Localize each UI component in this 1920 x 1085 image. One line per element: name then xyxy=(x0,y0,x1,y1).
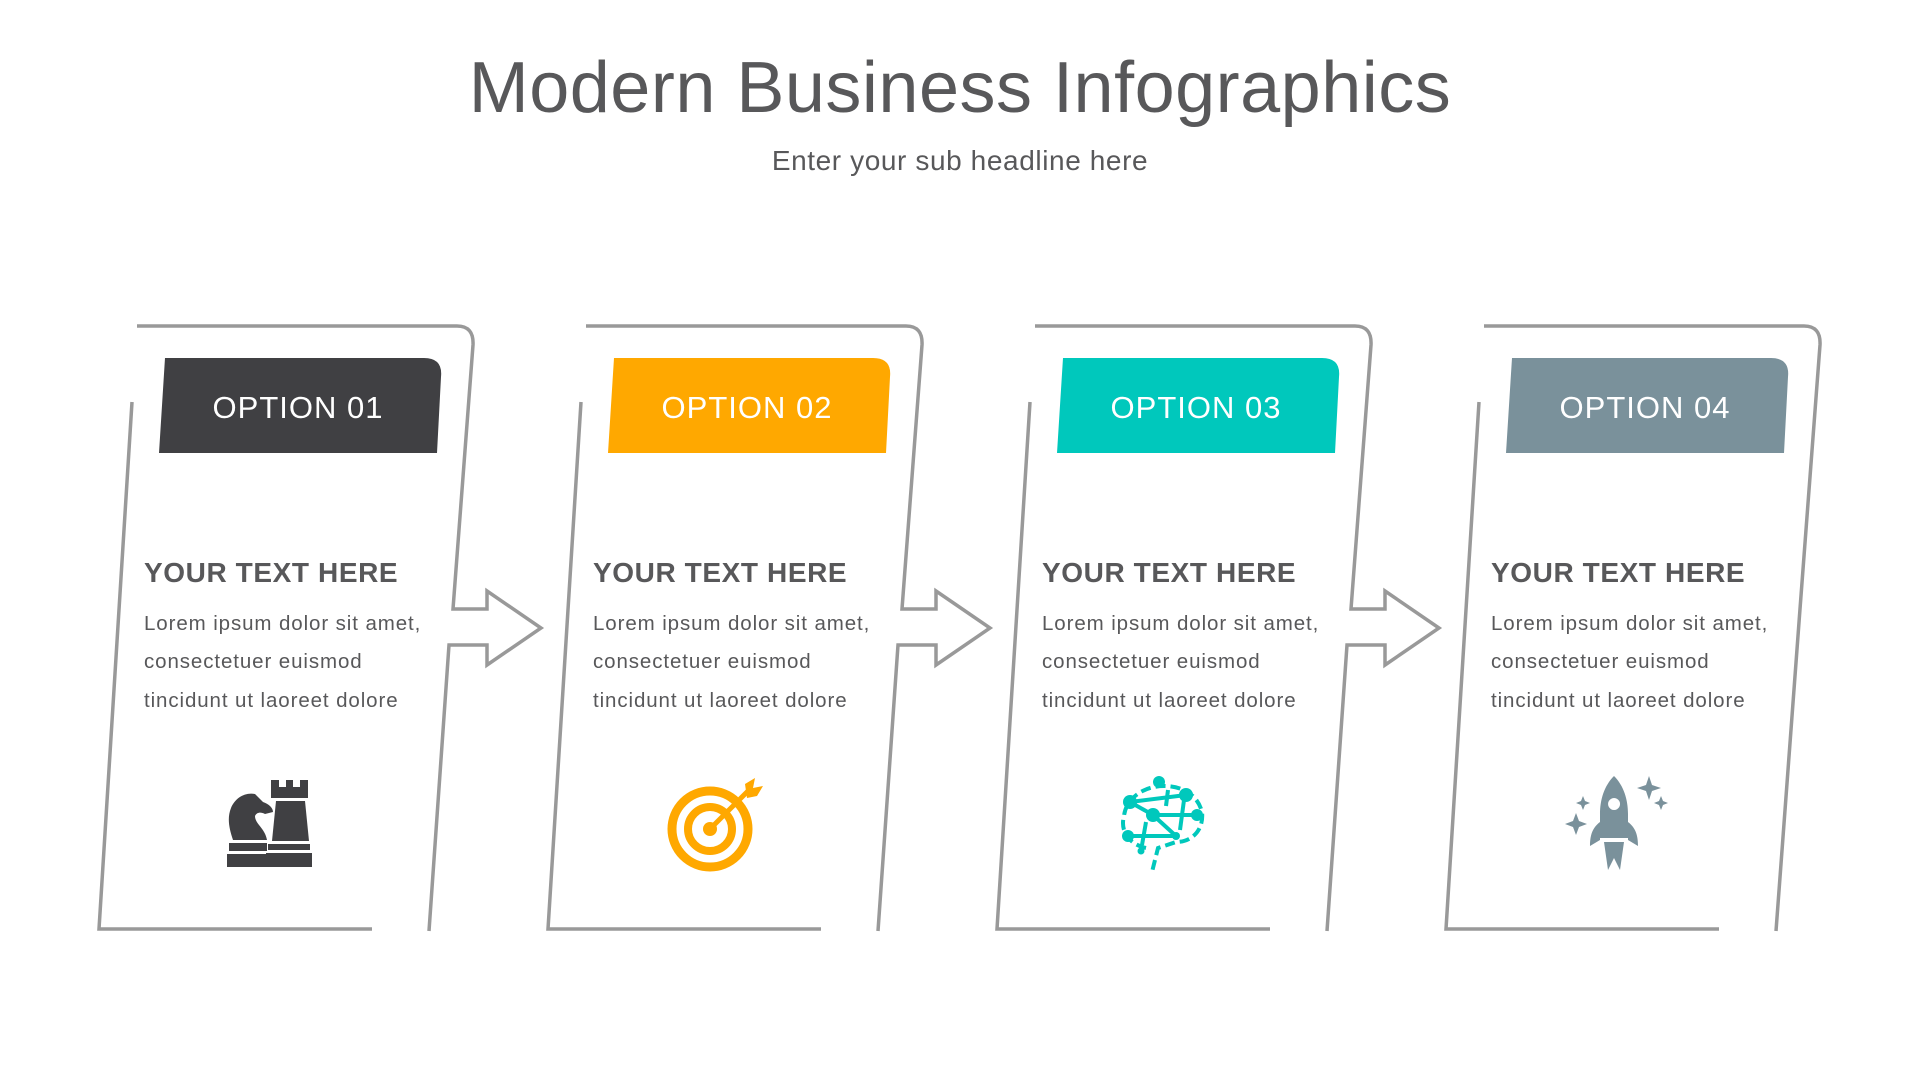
panel: option 02 xyxy=(548,326,990,931)
text block: consectetuer euismod xyxy=(144,650,363,673)
tab xyxy=(159,358,441,453)
text block: tincidunt ut laoreet dolore xyxy=(1042,689,1297,712)
outline with arrow xyxy=(548,326,990,931)
icon: rocket xyxy=(1565,776,1668,870)
icon: chess xyxy=(227,780,312,867)
title: Modern Business Infographics xyxy=(469,48,1451,128)
outline with arrow xyxy=(99,326,541,931)
icon: brain network xyxy=(1122,776,1203,872)
outline with arrow xyxy=(997,326,1439,931)
text block: Lorem ipsum dolor sit amet, xyxy=(1042,612,1319,635)
text block: consectetuer euismod xyxy=(593,650,812,673)
text block: YOUR TEXT HERE xyxy=(144,557,398,588)
text block: consectetuer euismod xyxy=(1042,650,1261,673)
text block xyxy=(1042,557,1319,712)
panel: option 01 xyxy=(99,326,541,931)
text block: consectetuer euismod xyxy=(1491,650,1710,673)
outline xyxy=(1446,326,1820,931)
text block xyxy=(593,557,870,712)
text block: Lorem ipsum dolor sit amet, xyxy=(593,612,870,635)
text block: YOUR TEXT HERE xyxy=(1491,557,1745,588)
tab: OPTION 01 xyxy=(213,390,383,425)
text block: YOUR TEXT HERE xyxy=(593,557,847,588)
tab: OPTION 03 xyxy=(1111,390,1281,425)
tab xyxy=(1506,358,1788,453)
text block: tincidunt ut laoreet dolore xyxy=(1491,689,1746,712)
subtitle: Enter your sub headline here xyxy=(772,145,1148,176)
tab xyxy=(608,358,890,453)
tab: OPTION 04 xyxy=(1560,390,1730,425)
text block: Lorem ipsum dolor sit amet, xyxy=(1491,612,1768,635)
tab: OPTION 02 xyxy=(662,390,832,425)
text block: YOUR TEXT HERE xyxy=(1042,557,1296,588)
text block xyxy=(1491,557,1768,712)
panel: option 04 xyxy=(1446,326,1820,931)
text block: tincidunt ut laoreet dolore xyxy=(593,689,848,712)
text block xyxy=(144,557,421,712)
icon: target xyxy=(672,778,763,867)
text block: Lorem ipsum dolor sit amet, xyxy=(144,612,421,635)
tab xyxy=(1057,358,1339,453)
panel: option 03 xyxy=(997,326,1439,931)
text block: tincidunt ut laoreet dolore xyxy=(144,689,399,712)
